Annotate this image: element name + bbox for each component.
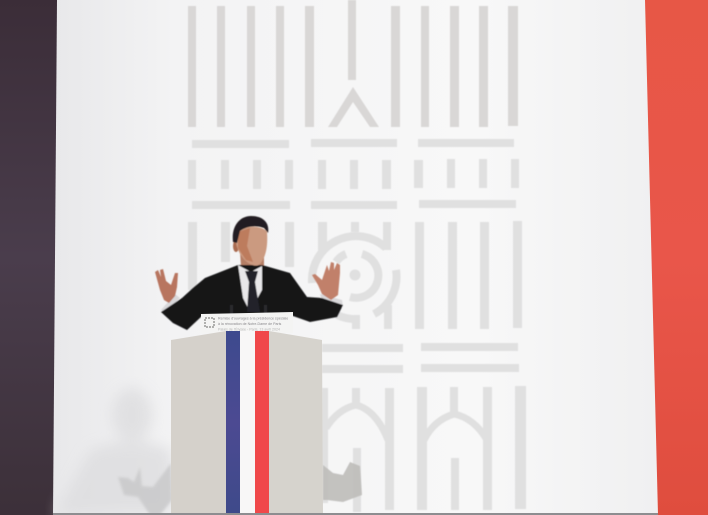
speaker shadow on screen bbox=[57, 388, 362, 515]
first horizontal band bbox=[192, 139, 514, 148]
second horizontal band bbox=[192, 200, 516, 209]
sign text bbox=[218, 316, 288, 332]
lectern left panel bbox=[171, 331, 226, 515]
hair bbox=[233, 216, 268, 243]
suit bbox=[161, 265, 343, 330]
shirt cuffs bbox=[161, 294, 180, 314]
sign text: Palais de l'Élysée - Paris, 13 avril 2024 bbox=[218, 326, 280, 332]
arches bbox=[322, 386, 526, 512]
shadow of left hand bbox=[118, 463, 172, 515]
small vertical bars bbox=[188, 159, 519, 189]
shadow of right hand bbox=[323, 462, 362, 502]
rose window bbox=[312, 222, 397, 329]
ear bbox=[233, 240, 239, 252]
upper vertical bars bbox=[188, 0, 518, 127]
lectern sign bbox=[201, 312, 293, 333]
left hand bbox=[155, 269, 178, 303]
lectern right panel bbox=[269, 331, 323, 515]
head bbox=[235, 227, 267, 266]
microphones bbox=[230, 305, 267, 314]
lower horizontal bands bbox=[322, 343, 519, 373]
face shading bbox=[238, 228, 253, 262]
cathedral facade pattern bbox=[188, 0, 526, 512]
tie bbox=[245, 271, 260, 312]
floor edge bbox=[53, 513, 658, 515]
neck bbox=[240, 252, 264, 276]
speaker bbox=[155, 216, 343, 330]
left dark wall bbox=[0, 0, 60, 515]
flag stripe blue bbox=[226, 331, 240, 515]
sign emblem bbox=[205, 318, 214, 327]
sign text: à la rénovation de Notre-Dame de Paris bbox=[218, 322, 282, 326]
middle left bars bbox=[188, 222, 294, 290]
shirt bbox=[238, 265, 262, 312]
right red wall bbox=[640, 0, 708, 515]
flag stripe white bbox=[240, 331, 255, 515]
right middle bars bbox=[415, 221, 522, 329]
sign text: Remise d'ouvrages à la présidence spéciale bbox=[218, 316, 288, 320]
lectern bbox=[171, 331, 323, 515]
flag stripe red bbox=[255, 331, 269, 515]
right hand bbox=[312, 262, 340, 300]
